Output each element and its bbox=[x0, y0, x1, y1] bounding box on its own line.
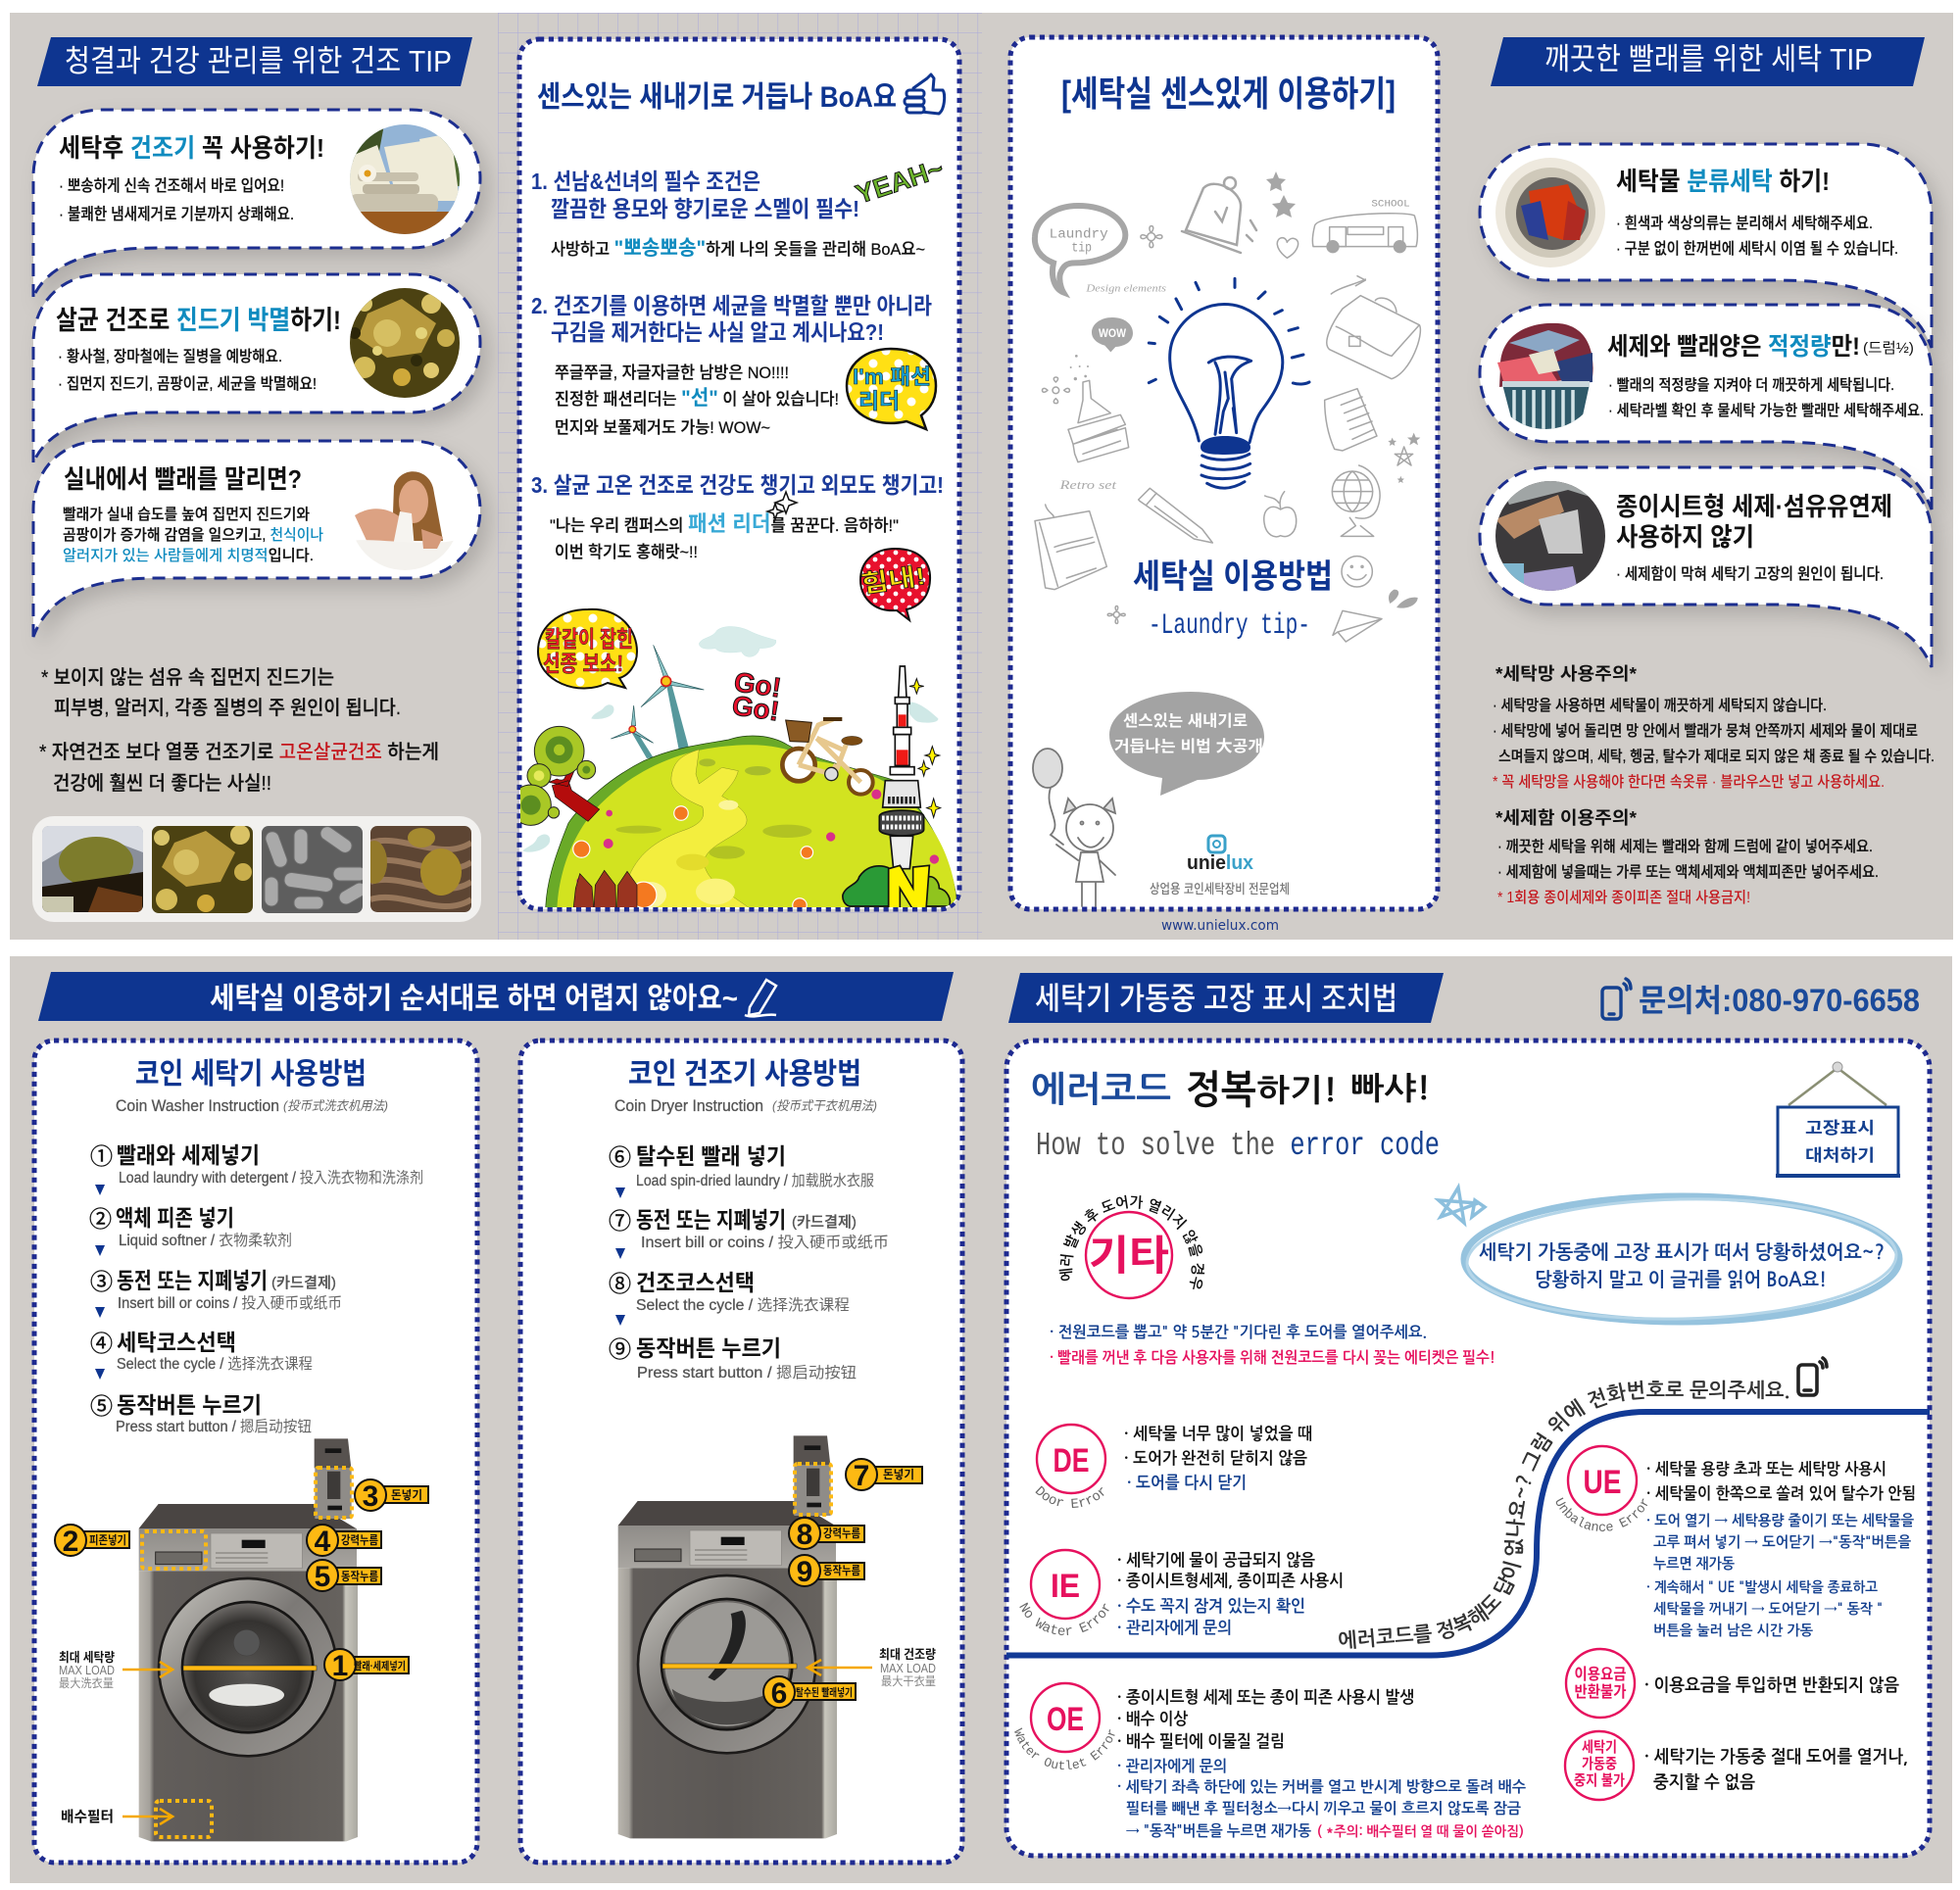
oval callout: 당황하지 말고 이 글귀를 읽어 BoA요! bbox=[1535, 1270, 1827, 1289]
sticker: fashion leader bubble bbox=[847, 349, 936, 429]
error OE: · 관리자에게 문의 bbox=[1117, 1758, 1227, 1774]
badge 9 start: 동작누름 bbox=[823, 1564, 860, 1577]
tip 2 text: 진정한 패션리더는 "선" 이 살아 있습니다! bbox=[555, 387, 839, 410]
error OE bbox=[1014, 1681, 1526, 1839]
note: detergent drawer caution: *세제함 이용주의* bbox=[1495, 808, 1637, 828]
steps list washer: ③ bbox=[90, 1269, 113, 1294]
doodle speech balloon: tip bbox=[1071, 241, 1092, 257]
error OE: · 배수 이상 bbox=[1117, 1710, 1188, 1727]
note: laundry net caution: · 세탁망을 사용하면 세탁물이 깨끗하게 세탁되지 않습니다. bbox=[1493, 697, 1827, 714]
badge 5 start bbox=[307, 1560, 381, 1593]
error OE: Water Outlet Error bbox=[1014, 1727, 1115, 1769]
steps list dryer: 동전 또는 지폐넣기 bbox=[636, 1207, 786, 1233]
doodle set: bulb surroundings bbox=[1035, 199, 1420, 642]
icon: thumbs up bbox=[905, 74, 945, 114]
notice: fee not refundable: 이용요금 bbox=[1574, 1666, 1627, 1683]
speech bubble 3: indoor drying warning: 빨래가 실내 습도를 높여 집먼지 진드기와 bbox=[63, 506, 310, 523]
title: sensible freshman: 센스있는 새내기로 거듭나 BoA요 bbox=[537, 81, 897, 114]
error IE: No Water Error bbox=[1019, 1603, 1109, 1635]
badge 5 start: 5 bbox=[315, 1561, 330, 1593]
bag and notepad doodles bbox=[1325, 276, 1420, 451]
steps list dryer: Insert bill or coins / 投入硬币或纸币 bbox=[641, 1234, 889, 1251]
speech bubble 1: use dryer: 세탁후 건조기 꼭 사용하기! bbox=[59, 133, 324, 163]
badge 6 spun laundry bbox=[763, 1676, 856, 1710]
arrow: max load bbox=[122, 1662, 172, 1677]
error IE: · 세탁기에 물이 공급되지 않음 bbox=[1117, 1551, 1315, 1569]
speech bubble 2: mite extermination: · 황사철, 장마철에는 질병을 예방해요. bbox=[58, 348, 282, 365]
error OE: OE bbox=[1047, 1701, 1084, 1738]
photo strip: mites and bacteria bbox=[32, 816, 481, 922]
speech bubble 3: indoor drying warning: 알러지가 있는 사람들에게 치명적입니다. bbox=[63, 547, 314, 564]
steps list washer: ② bbox=[89, 1206, 112, 1232]
error OE: · 종이시트형 세제 또는 종이 피존 사용시 발생 bbox=[1117, 1688, 1414, 1706]
badge 3 coin box: 3 bbox=[363, 1480, 378, 1513]
panel: drying tips bbox=[32, 37, 481, 922]
icon: blue light bulb bbox=[1149, 278, 1309, 488]
gray speech bubble: 센스있는 새내기로 bbox=[1123, 712, 1248, 730]
title: coin washer: (投币式洗衣机用法) bbox=[283, 1098, 388, 1113]
steps list dryer: ⑧ bbox=[609, 1271, 631, 1296]
title: coin washer: 코인 세탁기 사용방법 bbox=[135, 1058, 367, 1090]
speech bubble: sort laundry: 세탁물 분류세탁 하기! bbox=[1616, 167, 1830, 196]
speech bubble 3: indoor drying warning: 곰팡이가 증가해 감염을 일으키고, 천식이나 bbox=[63, 526, 323, 544]
doodle: clock and stars bbox=[1182, 171, 1296, 253]
error IE: · 관리자에게 문의 bbox=[1117, 1619, 1232, 1636]
badge 4 heavy bbox=[307, 1525, 381, 1558]
heading: drying tip banner: 청결과 건강 관리를 위한 건조 TIP bbox=[65, 44, 452, 78]
notice: no stopping while running: 가동중 bbox=[1582, 1756, 1617, 1772]
error OE: 필터를 빼낸 후 필터청소→다시 끼우고 물이 흐르지 않도록 잠금 bbox=[1126, 1800, 1521, 1817]
other errors instructions: · 빨래를 꺼낸 후 다음 사용자를 위해 전원코드를 다시 꽂는 에티켓은 필수! bbox=[1050, 1349, 1495, 1366]
badge 6 spun laundry: 6 bbox=[771, 1677, 787, 1710]
error DE: DE bbox=[1053, 1442, 1090, 1479]
WOW bubble: WOW bbox=[1099, 326, 1127, 340]
icon: pen bbox=[745, 980, 776, 1016]
tip 3 text bbox=[531, 472, 944, 561]
steps list washer: Load laundry with detergent / 投入洗衣物和洗涤剂 bbox=[119, 1169, 423, 1187]
title: conquer error code bbox=[1031, 1070, 1431, 1109]
tip 2 text bbox=[531, 293, 932, 437]
speech bubble 3: indoor drying warning bbox=[33, 441, 480, 637]
steps list washer: ④ bbox=[90, 1331, 113, 1356]
photo: towels and laundry bbox=[350, 124, 460, 234]
max load label washer bbox=[59, 1650, 115, 1690]
badge 8 heavy: 강력누름 bbox=[823, 1527, 860, 1540]
speech bubble: proper amount: 세제와 빨래양은 적정량만! bbox=[1607, 333, 1860, 361]
title: coin dryer bbox=[614, 1058, 877, 1115]
title: conquer error code: 정복 bbox=[1186, 1070, 1256, 1109]
steps list washer: Press start button / 摁启动按钮 bbox=[116, 1418, 312, 1435]
blue star doodle bbox=[1439, 1187, 1485, 1223]
notice: no stopping while running bbox=[1565, 1731, 1908, 1800]
WOW bubble bbox=[1092, 317, 1133, 352]
speech bubble: proper amount bbox=[1480, 305, 1932, 509]
GO GO lettering: Go! bbox=[730, 690, 781, 727]
error IE bbox=[1019, 1548, 1344, 1636]
doodle: girl with balloon bbox=[1033, 749, 1115, 906]
tip 1 text bbox=[531, 169, 925, 260]
retro caption: Retro set bbox=[1058, 478, 1117, 492]
namsan tower bbox=[879, 666, 924, 869]
sign: fault display: 고장표시 bbox=[1805, 1119, 1875, 1138]
curved text: call us: 에러코드를 정복해도 답이 없나요~? 그럼 위에 전화번호로 문의주세요. bbox=[1339, 1380, 1789, 1649]
gray speech bubble bbox=[1109, 692, 1264, 796]
icon: smartphone bbox=[1602, 979, 1631, 1019]
icon: sparkles bbox=[767, 492, 797, 519]
flowers bbox=[573, 790, 939, 912]
steps list dryer: ⑨ bbox=[609, 1336, 631, 1362]
tip 1 text: 깔끔한 용모와 향기로운 스멜이 필수! bbox=[551, 196, 859, 221]
max load label washer: MAX LOAD bbox=[59, 1663, 115, 1677]
GO GO lettering bbox=[730, 666, 783, 727]
error UE: · 계속해서 " UE "발생시 세탁을 종료하고 bbox=[1646, 1579, 1878, 1595]
url: www.unielux.com bbox=[1161, 918, 1279, 934]
gray speech bubble: 거듭나는 비법 大공개 bbox=[1114, 738, 1263, 755]
panel: freshman style bbox=[511, 39, 959, 912]
error DE bbox=[1035, 1423, 1312, 1508]
error UE: Unbalance Error bbox=[1556, 1497, 1648, 1531]
bicycle bbox=[782, 719, 873, 795]
title: coin dryer: (投币式干衣机用法) bbox=[772, 1098, 877, 1113]
speech bubble: no paper sheets: 종이시트형 세제·섬유유연제 bbox=[1616, 492, 1892, 521]
badge 2 softener: 2 bbox=[63, 1526, 78, 1558]
sticker: fashion leader bubble: 리더 bbox=[858, 389, 900, 413]
oval callout: 세탁기 가동중에 고장 표시가 떠서 당황하셨어요~? bbox=[1479, 1242, 1885, 1262]
path bbox=[622, 750, 752, 909]
badge 3 coin box bbox=[355, 1479, 428, 1513]
YEAH sticker: YEAH~ bbox=[853, 154, 947, 210]
photo: sneezing woman bbox=[355, 471, 453, 570]
speech bubble: no paper sheets: · 세제함이 막혀 세탁기 고장의 원인이 됩니다. bbox=[1616, 565, 1884, 583]
steps list dryer: (카드결제) bbox=[792, 1214, 857, 1231]
sign: fault display: 대처하기 bbox=[1805, 1146, 1875, 1165]
notice: no stopping while running: 중지 불가 bbox=[1574, 1772, 1625, 1789]
notice: no stopping while running: · 세탁기는 가동중 절대 도어를 열거나, bbox=[1644, 1747, 1908, 1766]
note: laundry net caution: *세탁망 사용주의* bbox=[1495, 664, 1637, 684]
error UE: 버튼을 눌러 남은 시간 가동 bbox=[1653, 1623, 1813, 1638]
title: laundry room usage: 세탁실 이용방법 bbox=[1133, 558, 1333, 596]
speech bubble: sort laundry: · 흰색과 색상의류는 분리해서 세탁해주세요. bbox=[1616, 215, 1873, 232]
arrow: dryer max load bbox=[808, 1660, 872, 1675]
notice: no stopping while running: 세탁기 bbox=[1582, 1739, 1617, 1756]
photo: laundry basket bbox=[1491, 319, 1600, 429]
steps list dryer: 탈수된 빨래 넣기 bbox=[636, 1143, 786, 1169]
tip 1 text: 1. 선남&선녀의 필수 조건은 bbox=[531, 169, 760, 194]
error UE: 누르면 재가동 bbox=[1653, 1556, 1735, 1572]
steps list washer: Select the cycle / 选择洗衣课程 bbox=[117, 1355, 313, 1373]
badge 7 coin box: 7 bbox=[854, 1460, 869, 1492]
note: unseen dust mites: 건강에 훨씬 더 좋다는 사실!! bbox=[53, 772, 271, 795]
heading: washing tip banner: 깨끗한 빨래를 위한 세탁 TIP bbox=[1544, 42, 1873, 76]
error UE: UE bbox=[1584, 1464, 1621, 1501]
badge 2 softener: 피존넣기 bbox=[89, 1532, 126, 1547]
doodle flower heart bus bbox=[1141, 214, 1417, 258]
speech bubble 1: use dryer: · 불쾌한 냄새제거로 기분까지 상쾌해요. bbox=[59, 205, 294, 223]
title: conquer error code: 에러코드 bbox=[1031, 1071, 1171, 1107]
error OE: ( *주의: 배수필터 열 때 물이 쏟아짐) bbox=[1317, 1823, 1524, 1839]
error UE: · 도어 열기 → 세탁용량 줄이기 또는 세탁물을 bbox=[1646, 1513, 1914, 1528]
other errors stamp: · 에러 발생 후 도어가 열리지 않을 경우 bbox=[1058, 1195, 1205, 1289]
badge 4 heavy: 강력누름 bbox=[341, 1533, 378, 1547]
sign: fault display bbox=[1776, 1062, 1900, 1178]
heading: error codes banner: 세탁기 가동중 고장 표시 조치법 bbox=[1035, 981, 1397, 1016]
other errors instructions: · 전원코드를 뽑고" 약 5분간 "기다린 후 도어를 열어주세요. bbox=[1050, 1324, 1427, 1340]
washer machine bbox=[139, 1438, 358, 1841]
note: detergent drawer caution: · 세제함에 넣을때는 가루 또는 액체세제와 액체피존만 넣어주세요. bbox=[1497, 863, 1879, 881]
max load label dryer: MAX LOAD bbox=[880, 1661, 936, 1675]
speech bubble 2: mite extermination: · 집먼지 진드기, 곰팡이균, 세균을 박멸해요! bbox=[58, 375, 317, 393]
note: unseen dust mites: * 보이지 않는 섬유 속 집먼지 진드기는 bbox=[41, 666, 334, 689]
sticker: cheer up: 힘내! bbox=[859, 562, 927, 599]
tagline: 상업용 코인세탁장비 전문업체 bbox=[1150, 882, 1290, 897]
steps list washer: Insert bill or coins / 投入硬币或纸币 bbox=[118, 1294, 342, 1312]
badge 5 start: 동작누름 bbox=[341, 1570, 378, 1583]
steps list washer bbox=[89, 1142, 423, 1435]
max load label washer: 最大洗衣量 bbox=[59, 1676, 114, 1690]
speech bubble: proper amount: (드럼½) bbox=[1863, 340, 1914, 357]
script caption: Design elements bbox=[1085, 283, 1166, 294]
tip 2 text: 먼지와 보풀제거도 가능! WOW~ bbox=[555, 418, 770, 437]
steps list washer: 액체 피존 넣기 bbox=[116, 1205, 234, 1231]
speech bubble: no paper sheets: 사용하지 않기 bbox=[1616, 522, 1754, 552]
note: laundry net caution: · 세탁망에 넣어 돌리면 망 안에서 빨래가 뭉쳐 안쪽까지 세제와 물이 제대로 bbox=[1493, 722, 1918, 740]
subtitle: Laundry tip: -Laundry tip- bbox=[1149, 609, 1310, 643]
steps list dryer: 건조코스선택 bbox=[636, 1270, 755, 1295]
panel: coin dryer instructions bbox=[520, 1041, 962, 1863]
error IE: IE bbox=[1051, 1568, 1080, 1605]
tip 3 text: 이번 학기도 홍해랏~!! bbox=[555, 543, 698, 561]
speech bubble 2: mite extermination bbox=[33, 274, 480, 462]
tip 3 text: "나는 우리 캠퍼스의 패션 리더를 꿈꾼다. 음하하!" bbox=[550, 511, 899, 536]
title: coin dryer: 코인 건조기 사용방법 bbox=[628, 1058, 861, 1090]
heading: error codes banner bbox=[1008, 973, 1444, 1023]
notice: fee not refundable: 반환불가 bbox=[1574, 1683, 1627, 1701]
error OE: · 세탁기 좌측 하단에 있는 커버를 열고 반시계 방향으로 돌려 배수 bbox=[1117, 1778, 1526, 1795]
other errors instructions bbox=[1050, 1324, 1495, 1366]
sticker: picked clothing bubble: 칼같이 잡힌 bbox=[545, 626, 633, 652]
error DE: · 도어가 완전히 닫히지 않음 bbox=[1124, 1449, 1307, 1467]
badge 4 heavy: 4 bbox=[315, 1526, 331, 1558]
error UE: 세탁물을 꺼내기 → 도어닫기 →" 동작 " bbox=[1653, 1601, 1883, 1617]
steps list washer: ① bbox=[90, 1143, 113, 1169]
title: coin washer: Coin Washer Instruction bbox=[116, 1096, 279, 1115]
tree bbox=[511, 726, 600, 825]
yellow callout marks dryer bbox=[662, 1464, 831, 1669]
tip 2 text: 구김을 제거한다는 사실 알고 계시나요?! bbox=[551, 319, 884, 345]
steps list washer: 빨래와 세제넣기 bbox=[117, 1142, 260, 1168]
error DE: · 도어를 다시 닫기 bbox=[1127, 1474, 1247, 1491]
doodle speech balloon: Laundry bbox=[1050, 227, 1108, 243]
note: detergent drawer caution bbox=[1495, 808, 1879, 906]
notice: no stopping while running: 중지할 수 없음 bbox=[1653, 1772, 1755, 1791]
doodle set: bulb surroundings: SCHOOL bbox=[1371, 199, 1410, 210]
error IE: · 종이시트형세제, 종이피존 사용시 bbox=[1117, 1572, 1344, 1589]
sticker: cheer up bbox=[859, 549, 930, 620]
bush and N letter bbox=[843, 865, 950, 909]
sticker: picked clothing bubble bbox=[538, 609, 637, 689]
badge 1 load: 빨래·세제넣기 bbox=[354, 1659, 406, 1672]
icon: small phone bbox=[1798, 1358, 1827, 1395]
GO GO lettering: Go! bbox=[732, 666, 783, 703]
note: laundry net caution bbox=[1493, 664, 1935, 791]
badge 8 heavy bbox=[789, 1518, 864, 1551]
heading: washing tip banner bbox=[1491, 37, 1925, 86]
title: conquer error code: 빠샤! bbox=[1351, 1073, 1431, 1104]
contact phone: 문의처:080-970-6658 bbox=[1639, 983, 1920, 1018]
speech bubble 3: indoor drying warning: 실내에서 빨래를 말리면? bbox=[64, 464, 302, 494]
heading: usage order banner bbox=[38, 972, 954, 1021]
speech bubble: sort laundry: · 구분 없이 한꺼번에 세탁시 이염 될 수 있습니다. bbox=[1616, 240, 1898, 258]
logo: unielux: unielux bbox=[1187, 852, 1253, 874]
notice: fee not refundable: · 이용요금을 투입하면 반환되지 않음 bbox=[1644, 1675, 1899, 1694]
steps list washer: Liquid softner / 衣物柔软剂 bbox=[119, 1232, 292, 1249]
steps list dryer: ⑦ bbox=[609, 1208, 631, 1234]
steps list dryer: Press start button / 摁启动按钮 bbox=[637, 1364, 857, 1381]
sticker: picked clothing bubble: 선종 보소! bbox=[543, 651, 623, 676]
arrow: drain filter bbox=[122, 1809, 172, 1824]
speech bubble 1: use dryer bbox=[33, 110, 480, 297]
steps list dryer: ⑥ bbox=[609, 1144, 631, 1170]
max load label dryer: 最大干衣量 bbox=[881, 1674, 936, 1688]
hill bbox=[546, 736, 957, 909]
wooden fence bbox=[573, 870, 637, 909]
speech bubble 2: mite extermination: 살균 건조로 진드기 박멸하기! bbox=[56, 306, 341, 335]
heading: drying tip banner bbox=[37, 37, 472, 86]
tip 1 text: 사방하고 "뽀송뽀송"하게 나의 옷들을 관리해 BoA요~ bbox=[551, 237, 925, 260]
max load label dryer: 최대 건조량 bbox=[879, 1647, 936, 1662]
error OE: → "동작"버튼을 누르면 재가동 bbox=[1126, 1822, 1311, 1839]
cloud and wind turbines bbox=[522, 626, 938, 852]
max load label washer: 최대 세탁량 bbox=[59, 1650, 115, 1665]
steps list washer: (카드결제) bbox=[271, 1275, 336, 1291]
title: conquer error code: 하기! bbox=[1256, 1075, 1338, 1106]
speech bubble: sort laundry bbox=[1480, 144, 1932, 348]
tip 3 text: 3. 살균 고온 건조로 건강도 챙기고 외모도 챙기고! bbox=[531, 472, 944, 498]
photo: hand in detergent drawer bbox=[1495, 481, 1605, 591]
illustration: campus hill bbox=[511, 626, 957, 912]
steps list dryer: Load spin-dried laundry / 加载脱水衣服 bbox=[636, 1172, 874, 1189]
error UE: · 세탁물 용량 초과 또는 세탁망 사용시 bbox=[1646, 1461, 1886, 1478]
oval callout bbox=[1464, 1194, 1899, 1324]
subtitle: how to solve: How to solve the error code bbox=[1036, 1128, 1440, 1164]
error UE: · 세탁물이 한쪽으로 쏠려 있어 탈수가 안됨 bbox=[1646, 1484, 1916, 1502]
note: detergent drawer caution: · 깨끗한 세탁을 위해 세제는 빨래와 함께 드럼에 같이 넣어주세요. bbox=[1497, 838, 1873, 855]
note: unseen dust mites: * 자연건조 보다 열풍 건조기로 고온살균건조 하는게 bbox=[39, 741, 439, 763]
note: unseen dust mites bbox=[39, 666, 439, 795]
other errors stamp: 기타 bbox=[1089, 1233, 1169, 1279]
panel: coin washer instructions bbox=[34, 1041, 477, 1863]
sparkles bbox=[909, 679, 941, 817]
sticker: fashion leader bubble: I'm 패션 bbox=[853, 364, 931, 389]
title: coin dryer: Coin Dryer Instruction bbox=[614, 1096, 763, 1115]
error DE: Door Error bbox=[1035, 1485, 1103, 1508]
panel: laundry room cover bbox=[1010, 37, 1438, 934]
badge 2 softener bbox=[55, 1525, 129, 1558]
notice: fee not refundable bbox=[1566, 1649, 1899, 1718]
speech bubble: proper amount: · 세탁라벨 확인 후 물세탁 가능한 빨래만 세탁해주세요. bbox=[1608, 402, 1924, 419]
badge 1 load: 1 bbox=[332, 1650, 348, 1682]
error UE: 고루 펴서 넣기 → 도어닫기 →"동작"버튼을 bbox=[1653, 1534, 1911, 1550]
photo: dust mite macro bbox=[349, 288, 460, 398]
badge 7 coin box: 돈넣기 bbox=[883, 1467, 914, 1481]
steps list washer: 동전 또는 지폐넣기 bbox=[117, 1268, 268, 1293]
dryer machine bbox=[618, 1435, 837, 1838]
divider curve bbox=[1006, 1412, 1930, 1656]
error IE: · 수도 꼭지 잠겨 있는지 확인 bbox=[1117, 1597, 1305, 1615]
title: use laundry room sensibly: [세탁실 센스있게 이용하기] bbox=[1061, 73, 1396, 114]
speech bubble: no paper sheets bbox=[1480, 467, 1932, 667]
logo: unielux bbox=[1187, 836, 1253, 874]
label: drain filter: 배수필터 bbox=[61, 1809, 114, 1825]
max load label dryer bbox=[879, 1647, 936, 1688]
doodle speech balloon bbox=[1035, 206, 1125, 292]
error OE: · 배수 필터에 이물질 걸림 bbox=[1117, 1732, 1285, 1750]
steps list dryer bbox=[609, 1143, 889, 1381]
tip 2 text: 쭈글쭈글, 자글자글한 남방은 NO!!!! bbox=[555, 363, 789, 382]
note: laundry net caution: * 꼭 세탁망을 사용해야 한다면 속옷류 · 블라우스만 넣고 사용하세요. bbox=[1493, 773, 1885, 791]
tip 2 text: 2. 건조기를 이용하면 세균을 박멸할 뿐만 아니라 bbox=[531, 293, 932, 318]
badge 9 start bbox=[789, 1555, 864, 1588]
note: detergent drawer caution: * 1회용 종이세제와 종이피존 절대 사용금지! bbox=[1497, 889, 1750, 906]
other errors stamp bbox=[1058, 1195, 1205, 1299]
badge 1 load bbox=[324, 1649, 409, 1682]
steps list washer: ⑤ bbox=[90, 1393, 113, 1419]
heading: usage order banner: 세탁실 이용하기 순서대로 하면 어렵지 않아요~ bbox=[210, 983, 738, 1015]
steps list dryer: 동작버튼 누르기 bbox=[636, 1335, 781, 1361]
error DE: · 세탁물 너무 많이 넣었을 때 bbox=[1124, 1425, 1312, 1442]
speech bubble 1: use dryer: · 뽀송하게 신속 건조해서 바로 입어요! bbox=[59, 176, 284, 195]
steps list washer: 동작버튼 누르기 bbox=[117, 1392, 262, 1418]
speech bubble: proper amount: · 빨래의 적정량을 지켜야 더 깨끗하게 세탁됩니다. bbox=[1608, 376, 1894, 394]
badge 7 coin box bbox=[846, 1459, 922, 1492]
badge 6 spun laundry: 탈수된 빨래넣기 bbox=[796, 1685, 853, 1699]
badge 8 heavy: 8 bbox=[797, 1519, 812, 1551]
yellow callout marks washer bbox=[142, 1468, 352, 1837]
steps list dryer: Select the cycle / 选择洗衣课程 bbox=[636, 1296, 850, 1314]
photo: washer drum bbox=[1495, 158, 1605, 267]
error UE bbox=[1556, 1444, 1916, 1638]
flask books doodle bbox=[1042, 377, 1129, 462]
badge 3 coin box: 돈넣기 bbox=[391, 1487, 422, 1502]
panel: washing tips bbox=[1480, 37, 1935, 906]
title: coin washer bbox=[116, 1058, 388, 1115]
note: unseen dust mites: 피부병, 알러지, 각종 질병의 주 원인이 됩니다. bbox=[54, 697, 401, 719]
badge 9 start: 9 bbox=[797, 1556, 812, 1588]
book pencil apple globe doodle bbox=[1035, 447, 1413, 642]
steps list washer: 세탁코스선택 bbox=[117, 1330, 236, 1355]
